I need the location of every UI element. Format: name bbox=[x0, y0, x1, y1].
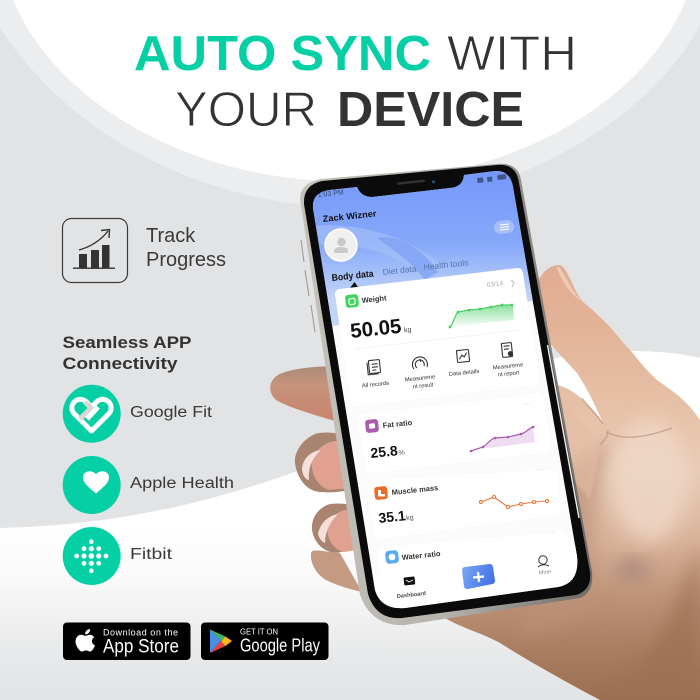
panel: track progress bbox=[62, 218, 226, 282]
icon: apple health heart bbox=[63, 456, 121, 514]
more dots: ··· bbox=[523, 400, 531, 408]
google fit row bbox=[63, 385, 213, 443]
screen bbox=[312, 171, 578, 608]
title: DEVICE bbox=[337, 83, 524, 137]
action labels: nt result bbox=[413, 382, 434, 390]
fat icon bbox=[365, 419, 379, 433]
tabs bbox=[331, 257, 469, 288]
card: weight bbox=[340, 273, 534, 401]
track progress label: Track bbox=[146, 225, 196, 247]
badge: google play bbox=[201, 622, 328, 660]
apple health row bbox=[63, 456, 234, 514]
finger one bbox=[270, 366, 340, 421]
fat chart bbox=[470, 426, 535, 452]
bottom navigation bbox=[370, 545, 590, 620]
tabs: Diet data bbox=[382, 263, 417, 277]
action labels bbox=[362, 363, 523, 388]
dashboard icon bbox=[404, 576, 415, 586]
finger two nail bbox=[302, 450, 321, 480]
app store text bbox=[103, 627, 179, 658]
fitbit row bbox=[63, 527, 173, 585]
title bbox=[134, 27, 577, 137]
menu button bbox=[494, 220, 514, 234]
fat value: % bbox=[398, 449, 405, 457]
icon: measurement report bbox=[501, 343, 513, 357]
icon: data details bbox=[456, 349, 470, 363]
action labels: Data details bbox=[449, 369, 480, 378]
icon: fitbit dots bbox=[63, 527, 121, 585]
hand holding the phone bbox=[270, 260, 700, 700]
heading: seamless app connectivity bbox=[62, 333, 192, 373]
tabs: Health tools bbox=[423, 257, 469, 272]
fat label: Fat ratio bbox=[382, 418, 413, 430]
side glare bbox=[548, 345, 579, 518]
finger three pad bbox=[327, 509, 366, 552]
more dots: ··· bbox=[546, 529, 554, 537]
finger two pad bbox=[312, 441, 350, 490]
weight label: Weight bbox=[361, 293, 387, 305]
weight value: kg bbox=[404, 327, 412, 334]
user name: Zack Wizner bbox=[322, 208, 377, 224]
card: water ratio bbox=[385, 532, 575, 580]
chevron bbox=[511, 280, 514, 287]
icon: apple logo bbox=[76, 629, 95, 652]
thumbnail highlight bbox=[557, 266, 581, 301]
weight icon bbox=[345, 294, 359, 308]
speaker and camera bbox=[397, 180, 435, 185]
icon: all records bbox=[367, 360, 381, 375]
palm creases bbox=[582, 398, 672, 445]
finger three nail bbox=[318, 514, 338, 543]
finger three bbox=[312, 504, 365, 553]
plus button bbox=[465, 567, 492, 586]
action labels: Measureme bbox=[405, 374, 436, 383]
app store text: App Store bbox=[103, 637, 179, 658]
muscle value: kg bbox=[406, 514, 414, 522]
icon: rising bar chart bbox=[62, 218, 128, 282]
heading: seamless app connectivity: Seamless APP bbox=[62, 333, 192, 352]
fat value: 25.8 bbox=[370, 442, 399, 461]
avatar bbox=[325, 229, 357, 261]
title: WITH bbox=[447, 27, 577, 81]
google fit label: Google Fit bbox=[130, 404, 213, 421]
apple health label: Apple Health bbox=[130, 475, 234, 492]
fitbit label: Fitbit bbox=[130, 546, 173, 563]
google play text: GET IT ON bbox=[240, 627, 278, 637]
muscle value: 35.1 bbox=[378, 507, 407, 526]
more dots: ··· bbox=[536, 466, 544, 474]
status bar: 1:03 PM bbox=[317, 189, 344, 199]
weight chart bbox=[449, 304, 514, 328]
muscle chart bbox=[479, 495, 549, 509]
dashboard label: Dashboard bbox=[397, 591, 427, 600]
bezel bbox=[304, 165, 590, 618]
little finger bbox=[311, 551, 362, 592]
mine icon bbox=[538, 556, 549, 567]
side buttons bbox=[301, 240, 315, 332]
icon: google fit bbox=[63, 385, 121, 443]
google play text bbox=[240, 627, 320, 656]
action labels: All records bbox=[362, 381, 390, 389]
phone body bbox=[300, 164, 592, 625]
muscle label: Muscle mass bbox=[391, 483, 439, 497]
title: AUTO SYNC bbox=[134, 27, 431, 81]
tabs: Body data bbox=[331, 269, 375, 284]
palm and thumb bbox=[430, 260, 700, 700]
card: muscle mass bbox=[374, 469, 550, 523]
water label: Water ratio bbox=[401, 549, 441, 562]
weight value bbox=[351, 318, 412, 338]
google play text: Google Play bbox=[240, 636, 320, 656]
app header bbox=[312, 171, 533, 326]
icon: google play triangle bbox=[210, 630, 232, 653]
phone bbox=[300, 160, 600, 630]
title: YOUR bbox=[175, 83, 317, 137]
track progress label: Progress bbox=[146, 249, 226, 271]
water icon bbox=[385, 550, 399, 564]
badge: app store bbox=[63, 622, 190, 660]
card: fat ratio bbox=[365, 403, 535, 458]
icon: measurement gauge bbox=[412, 357, 427, 369]
muscle icon bbox=[374, 486, 388, 500]
finger two bbox=[295, 433, 350, 492]
status icons bbox=[477, 174, 506, 183]
heading: seamless app connectivity: Connectivity bbox=[62, 354, 178, 373]
muscle value bbox=[378, 510, 414, 523]
date: 03/14 bbox=[486, 280, 504, 289]
action labels: Measureme bbox=[493, 362, 524, 371]
action labels: nt report bbox=[498, 370, 520, 378]
mine label: Mine bbox=[539, 569, 551, 576]
fat value bbox=[370, 446, 405, 458]
app store text: Download on the bbox=[103, 627, 178, 637]
weight value: 50.05 bbox=[349, 315, 403, 343]
